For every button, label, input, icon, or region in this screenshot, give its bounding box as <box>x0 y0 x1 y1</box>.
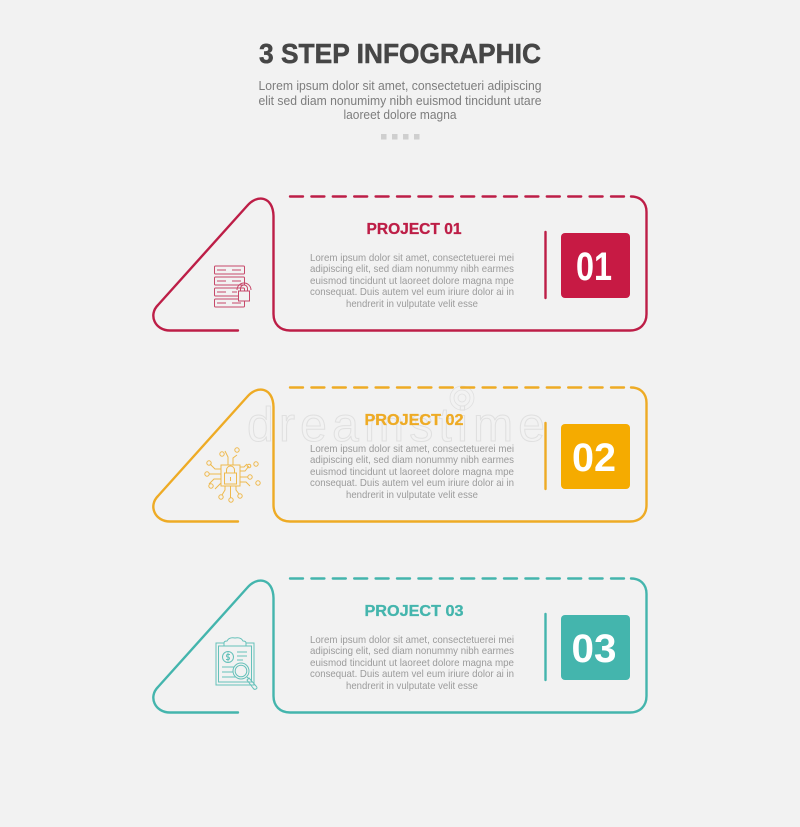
body text 01: euismod tincidunt ut laoreet dolore magna mpe <box>310 276 514 287</box>
panel: project 03 <box>153 578 646 712</box>
heading 03: PROJECT 03 <box>364 603 464 620</box>
body text 03: hendrerit in vulputate velit esse <box>346 681 478 692</box>
body text 03: consequat. Duis autem vel eum iriure dolor ai in <box>310 669 514 680</box>
body text 02: consequat. Duis autem vel eum iriure dolor ai in <box>310 478 514 489</box>
card outline 03 <box>153 578 646 712</box>
number badge 03 <box>561 615 630 680</box>
body text 03: adipiscing elit, sed diam nonummy nibh earmes <box>310 646 514 657</box>
intro text: elit sed diam nonumimy nibh euismod tincidunt utare <box>258 94 542 108</box>
body text 01: adipiscing elit, sed diam nonummy nibh earmes <box>310 264 514 275</box>
body text 02: adipiscing elit, sed diam nonummy nibh earmes <box>310 455 514 466</box>
number badge 03: 03 <box>572 627 616 671</box>
watermark: dreamstime <box>247 399 545 452</box>
icon: clipboard with magnifier <box>216 638 257 689</box>
heading 01: PROJECT 01 <box>366 221 462 238</box>
intro text: laoreet dolore magna <box>344 108 456 122</box>
body text 02: hendrerit in vulputate velit esse <box>346 490 478 501</box>
body text 02 <box>310 444 514 501</box>
body text 01: consequat. Duis autem vel eum iriure dolor ai in <box>310 287 514 298</box>
icon: circuit lock <box>205 448 260 502</box>
body text 01 <box>310 253 514 310</box>
body text 03: euismod tincidunt ut laoreet dolore magna mpe <box>310 658 514 669</box>
title: 3 STEP INFOGRAPHIC <box>259 38 541 69</box>
intro text <box>258 79 542 122</box>
body text 01: Lorem ipsum dolor sit amet, consectetuerei mei <box>310 253 514 264</box>
number badge 02: 02 <box>572 436 616 480</box>
body text 02: Lorem ipsum dolor sit amet, consectetuerei mei <box>310 444 514 455</box>
body text 03: Lorem ipsum dolor sit amet, consectetuerei mei <box>310 635 514 646</box>
icon: server with lock <box>214 266 251 307</box>
body text 03 <box>310 635 514 692</box>
panel: project 01 <box>153 196 646 330</box>
number badge 01: 01 <box>576 245 612 289</box>
card outline 01 <box>153 196 646 330</box>
decorative dots <box>381 134 420 140</box>
body text 01: hendrerit in vulputate velit esse <box>346 299 478 310</box>
number badge 02 <box>561 424 630 489</box>
body text 02: euismod tincidunt ut laoreet dolore magna mpe <box>310 467 514 478</box>
card outline 02 <box>153 388 646 522</box>
intro text: Lorem ipsum dolor sit amet, consectetueri adipiscing <box>258 79 542 93</box>
number badge 01 <box>561 233 630 298</box>
heading 02: PROJECT 02 <box>364 412 464 429</box>
panel: project 02 <box>153 388 646 522</box>
